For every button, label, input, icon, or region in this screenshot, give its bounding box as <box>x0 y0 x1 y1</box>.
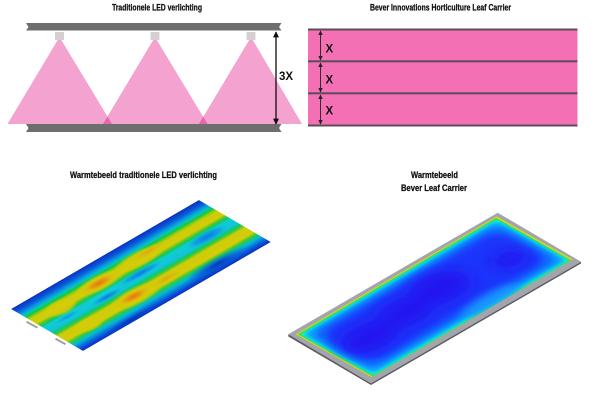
heading: thermal image traditional: Warmtebeeld traditionele LED verlichting <box>70 170 217 180</box>
mounting clips <box>26 321 66 345</box>
diagram: traditional LED lighting <box>8 23 302 132</box>
shelves <box>308 28 578 126</box>
top rail <box>26 23 282 30</box>
heading: thermal image Bever Leaf Carrier: Bever Leaf Carrier <box>401 183 467 193</box>
label: 3X: 3X <box>279 71 293 83</box>
heading: traditional LED lighting: Traditionele LED verlichting <box>112 2 202 12</box>
height arrow <box>275 32 277 124</box>
spacing arrows <box>320 31 322 124</box>
spacing labels: X <box>326 74 334 86</box>
diagram: Leaf Carrier layers <box>308 28 578 126</box>
heading: Bever Leaf Carrier: Bever Innovations Horticulture Leaf Carrier <box>370 2 511 12</box>
pink light layers <box>308 30 578 126</box>
heading: thermal image Bever Leaf Carrier <box>401 170 467 193</box>
spacing labels <box>326 44 334 118</box>
cool core <box>328 246 532 362</box>
heatmap: traditional LED lighting <box>11 200 273 352</box>
spacing labels: X <box>326 44 334 56</box>
thermal surface <box>296 216 574 378</box>
grey frame <box>288 213 581 383</box>
lamps <box>55 32 256 40</box>
warm patch along lower edge <box>455 280 526 321</box>
spacing labels: X <box>326 106 334 118</box>
thermal surface <box>11 200 273 352</box>
light cones <box>8 37 302 124</box>
heading: thermal image Bever Leaf Carrier: Warmtebeeld <box>411 170 458 180</box>
heatmap: Bever Leaf Carrier <box>288 213 581 385</box>
bottom rail <box>26 124 282 132</box>
